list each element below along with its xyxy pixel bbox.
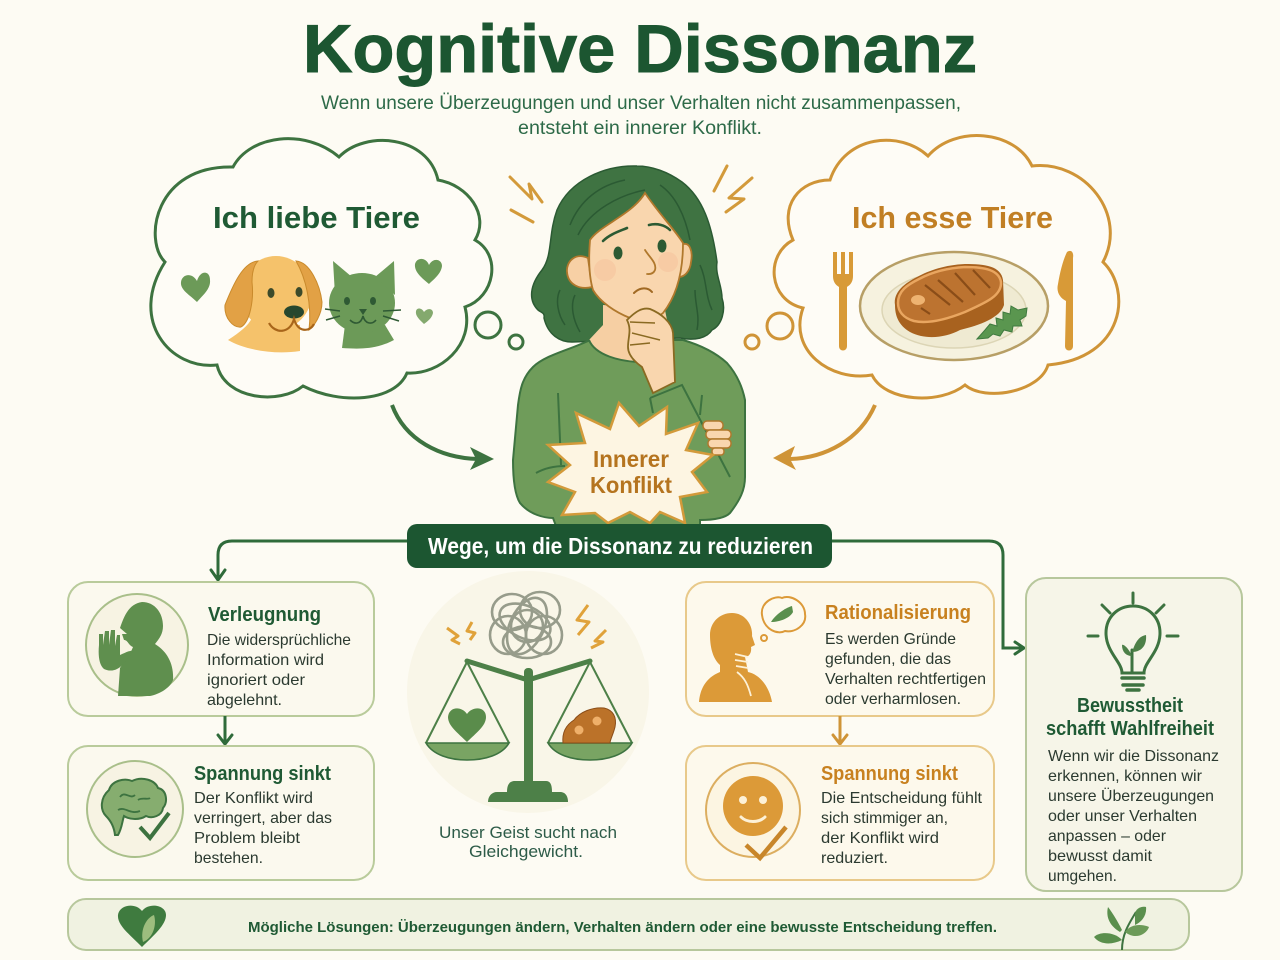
panel: Bewusstheit — [1026, 578, 1242, 891]
callout: Innerer Konflikt starburst: Konflikt — [590, 472, 672, 498]
hair — [532, 166, 724, 342]
icon: knife — [1057, 251, 1073, 350]
icon: scale — [426, 661, 632, 802]
text: Mögliche Lösungen: Mögliche Lösungen: Überzeugungen ändern, Verhalten ändern oder eine bewusste Entscheidung treffen. — [248, 919, 997, 936]
icon: fork — [833, 252, 853, 350]
text: Spannung sinkt orange description: reduziert. — [821, 850, 888, 867]
arrow: banner to Verleugnung — [211, 541, 410, 580]
text: Bewusstheit description: anpassen – oder — [1048, 828, 1167, 845]
heading: Bewusstheit schafft Wahlfreiheit — [1046, 695, 1214, 740]
heading: Spannung sinkt: Spannung sinkt — [194, 763, 331, 785]
face — [589, 193, 683, 320]
text: Spannung sinkt description: verringert, aber das — [194, 810, 332, 827]
hair strands — [558, 180, 712, 332]
text: scale caption — [439, 823, 617, 861]
icon: plate with steak — [860, 252, 1048, 360]
heading: Verleugnung: Verleugnung — [208, 604, 321, 626]
text: Verleugnung description: Information wird — [207, 652, 324, 669]
thought cloud: Ich liebe Tiere — [151, 139, 523, 398]
text: Bewusstheit description — [1048, 748, 1219, 885]
text: Verleugnung description: abgelehnt. — [207, 692, 282, 709]
arrow: Verleugnung to Spannung sinkt — [218, 716, 232, 744]
panel: Rationalisierung — [686, 582, 994, 716]
icon: heart with leaf — [118, 906, 166, 947]
heading: Spannung sinkt orange: Spannung sinkt — [821, 763, 958, 785]
text: Spannung sinkt orange description — [821, 790, 983, 867]
lightning marks: right — [714, 166, 752, 212]
arrow: green to person — [392, 405, 494, 470]
panel: Spannung sinkt orange — [686, 746, 994, 880]
text: Rationalisierung description: Es werden Gründe — [825, 631, 956, 648]
panel: Mögliche Lösungen — [68, 899, 1189, 950]
person: thinking woman — [513, 166, 745, 526]
text: Rationalisierung description: gefunden, die das — [825, 651, 951, 668]
text: Bewusstheit description: bewusst damit — [1048, 848, 1153, 865]
neck — [589, 305, 672, 362]
icon: heart small — [416, 308, 433, 324]
heading: Bewusstheit schafft Wahlfreiheit: schafft Wahlfreiheit — [1046, 718, 1214, 740]
icon: bolts — [447, 605, 606, 648]
text: Spannung sinkt orange description: sich stimmiger an, — [821, 810, 948, 827]
icon: smiley with check — [706, 763, 800, 858]
right hand — [703, 421, 731, 455]
arrow: orange to person — [773, 405, 875, 470]
callout: Innerer Konflikt starburst — [548, 403, 713, 523]
heading: Ich esse Tiere: Ich esse Tiere — [852, 200, 1053, 235]
text: Bewusstheit description: umgehen. — [1048, 868, 1117, 885]
panel: Spannung sinkt green — [68, 746, 374, 880]
text: Bewusstheit description: Wenn wir die Dissonanz — [1048, 748, 1219, 765]
text: scale caption: Gleichgewicht. — [469, 842, 583, 861]
callout: Innerer Konflikt starburst: Innerer — [593, 446, 669, 472]
text: Verleugnung description: Die widersprüchliche — [207, 632, 351, 649]
text: Spannung sinkt description: bestehen. — [194, 850, 263, 867]
panel: Verleugnung — [68, 582, 374, 716]
icon: tangled thoughts — [490, 592, 562, 660]
lightning marks: left — [510, 177, 542, 222]
text: Spannung sinkt description: Problem bleibt — [194, 830, 301, 847]
icon: dog — [225, 256, 322, 352]
banner: Wege: Wege, um die Dissonanz zu reduzieren — [428, 533, 813, 559]
icon: heart top right — [415, 259, 442, 284]
text: Rationalisierung description: Verhalten rechtfertigen — [825, 671, 986, 688]
text: scale caption: Unser Geist sucht nach — [439, 823, 617, 842]
heading: Rationalisierung: Rationalisierung — [825, 602, 971, 624]
text: Verleugnung description: ignoriert oder — [207, 672, 306, 689]
arrow: Rationalisierung to Spannung sinkt — [833, 716, 847, 744]
icon: light bulb with sprout — [1088, 593, 1178, 690]
ears — [567, 256, 592, 288]
banner: Wege — [407, 524, 832, 568]
title: Kognitive Dissonanz — [303, 11, 977, 87]
text: Spannung sinkt description: Der Konflikt wird — [194, 790, 313, 807]
text: Spannung sinkt orange description: Die Entscheidung fühlt — [821, 790, 983, 807]
icon: heart left — [181, 273, 210, 302]
sweater — [513, 340, 745, 526]
icon: stop hand person — [86, 594, 188, 696]
icon: plant — [1094, 907, 1149, 950]
text: Spannung sinkt description — [194, 790, 332, 867]
text: Rationalisierung description: oder verharmlosen. — [825, 691, 961, 708]
text: Bewusstheit description: erkennen, können wir — [1048, 768, 1203, 785]
hand on chin — [627, 309, 675, 393]
text: Bewusstheit description: unsere Überzeugungen — [1048, 787, 1214, 805]
arrow: banner to Bewusstheit — [830, 541, 1024, 654]
facial features — [603, 224, 670, 293]
icon: brain with check — [87, 761, 183, 857]
subtitle: entsteht ein innerer Konflikt. — [518, 118, 762, 139]
heading: Bewusstheit schafft Wahlfreiheit: Bewusstheit — [1077, 695, 1183, 717]
text: Spannung sinkt orange description: der Konflikt wird — [821, 830, 939, 847]
thought cloud: Ich esse Tiere — [745, 136, 1119, 398]
subtitle — [321, 93, 961, 139]
text: Rationalisierung description — [825, 631, 986, 708]
text: Verleugnung description — [207, 632, 351, 709]
panel: balance scale — [407, 571, 649, 861]
sleeve and sweater folds — [536, 385, 730, 477]
heading: Ich liebe Tiere: Ich liebe Tiere — [213, 200, 420, 235]
icon: cat — [325, 261, 401, 349]
icon: thinking person — [699, 597, 805, 702]
text: Bewusstheit description: oder unser Verhalten — [1048, 808, 1197, 825]
subtitle: Wenn unsere Überzeugungen und unser Verhalten nicht zusammenpassen, — [321, 93, 961, 114]
